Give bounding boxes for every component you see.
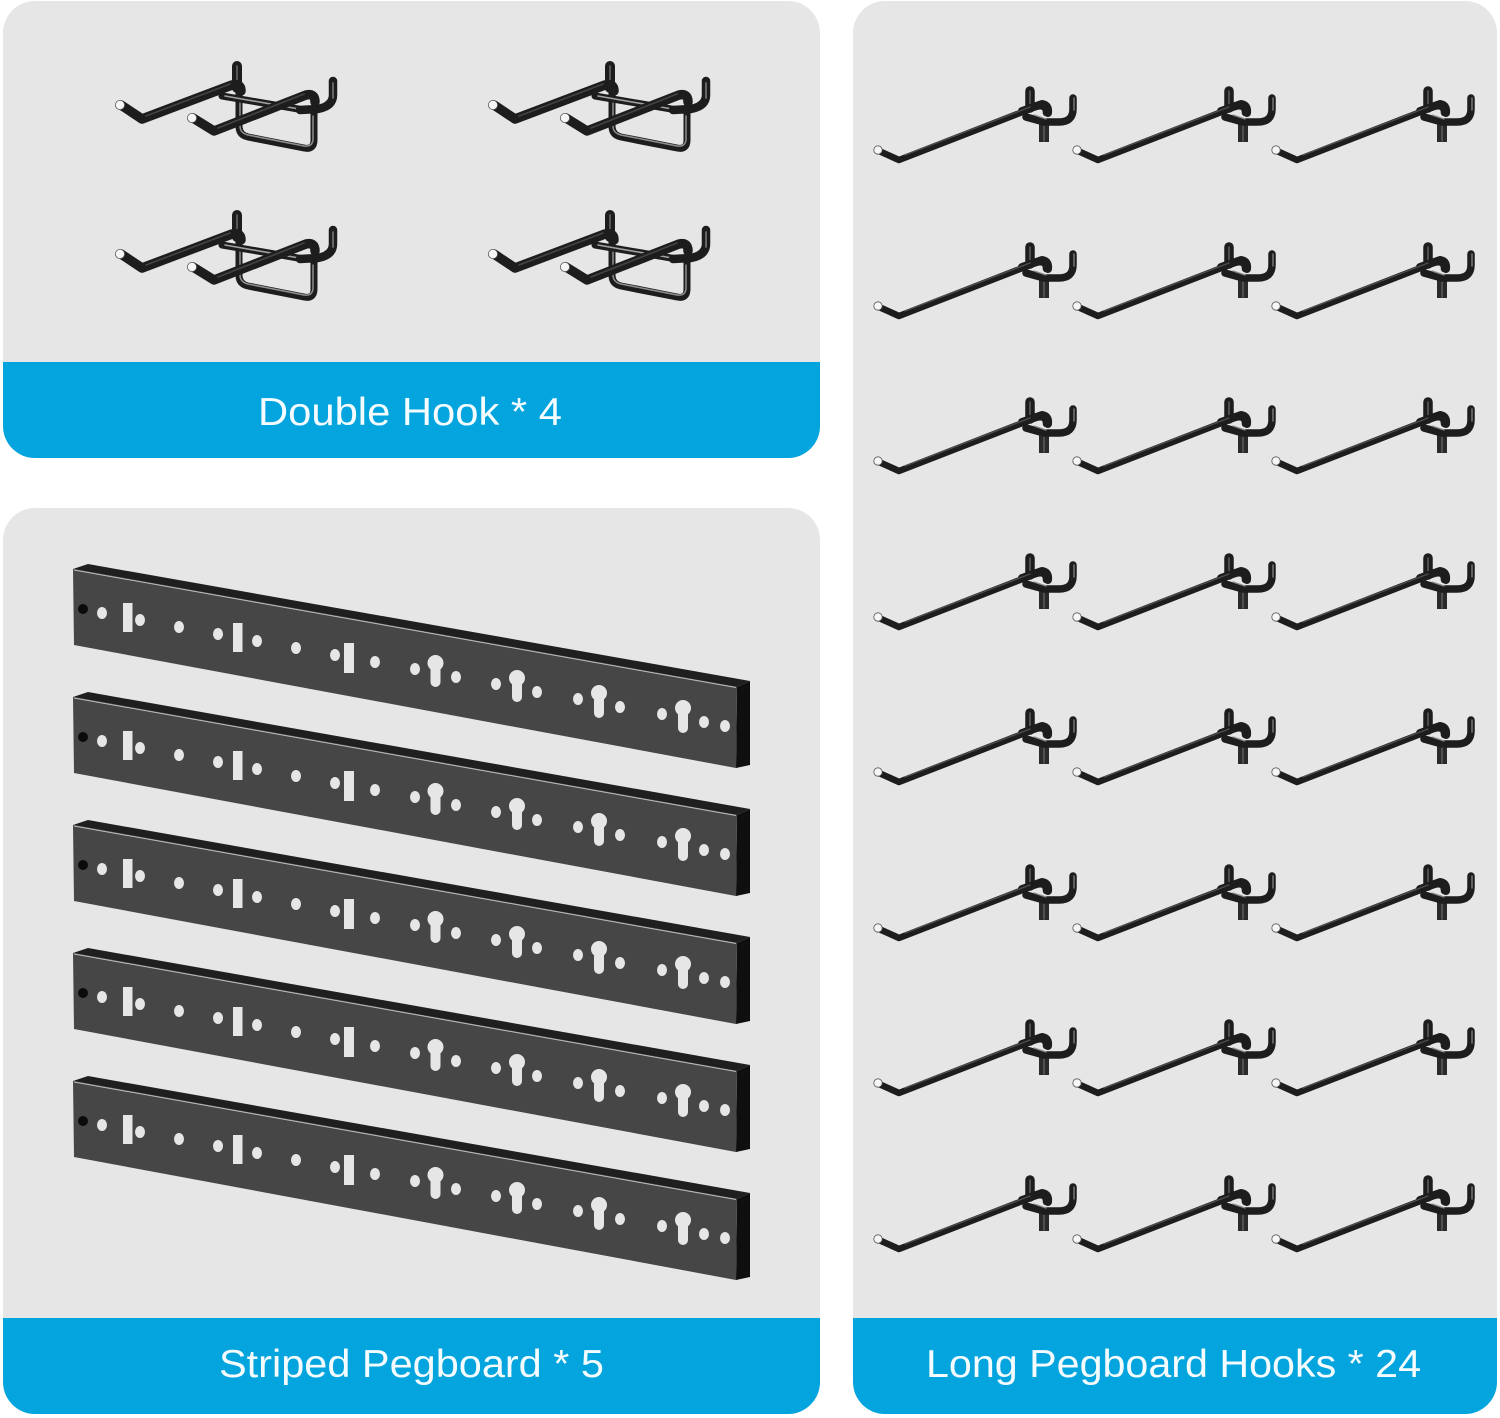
caption: striped pegboard: Striped Pegboard * 5 xyxy=(219,1343,604,1386)
hook row 4 xyxy=(874,558,1472,627)
double hook 3 xyxy=(115,215,333,297)
double hook 2 xyxy=(488,66,706,148)
pegboard strip 4 xyxy=(73,948,750,1152)
panel background: double hook xyxy=(3,1,820,458)
caption band: long pegboard hooks xyxy=(853,1318,1497,1414)
double hook 1 xyxy=(115,66,333,148)
caption band: double hook xyxy=(3,362,820,458)
hook row 6 xyxy=(874,869,1472,938)
hook row 3 xyxy=(874,402,1472,471)
hook row 5 xyxy=(874,713,1472,782)
panel background: long pegboard hooks xyxy=(853,1,1497,1414)
caption: long pegboard hooks: Long Pegboard Hooks * 24 xyxy=(926,1343,1421,1386)
double hook 4 xyxy=(488,215,706,297)
hook row 2 xyxy=(874,247,1472,316)
pegboard strip 2 xyxy=(73,692,750,896)
hook row 7 xyxy=(874,1024,1472,1093)
panel: long pegboard hooks xyxy=(853,1,1497,1414)
pegboard strip 3 xyxy=(73,820,750,1024)
caption: double hook: Double Hook * 4 xyxy=(258,391,562,434)
caption band: striped pegboard xyxy=(3,1318,820,1414)
pegboard strip 1 xyxy=(73,564,750,768)
hook row 8 xyxy=(874,1180,1472,1249)
panel: striped pegboard xyxy=(3,508,820,1414)
pegboard strip 5 xyxy=(73,1076,750,1280)
hook row 1 xyxy=(874,91,1472,160)
panel: double hook xyxy=(3,1,820,458)
panel background: striped pegboard xyxy=(3,508,820,1414)
